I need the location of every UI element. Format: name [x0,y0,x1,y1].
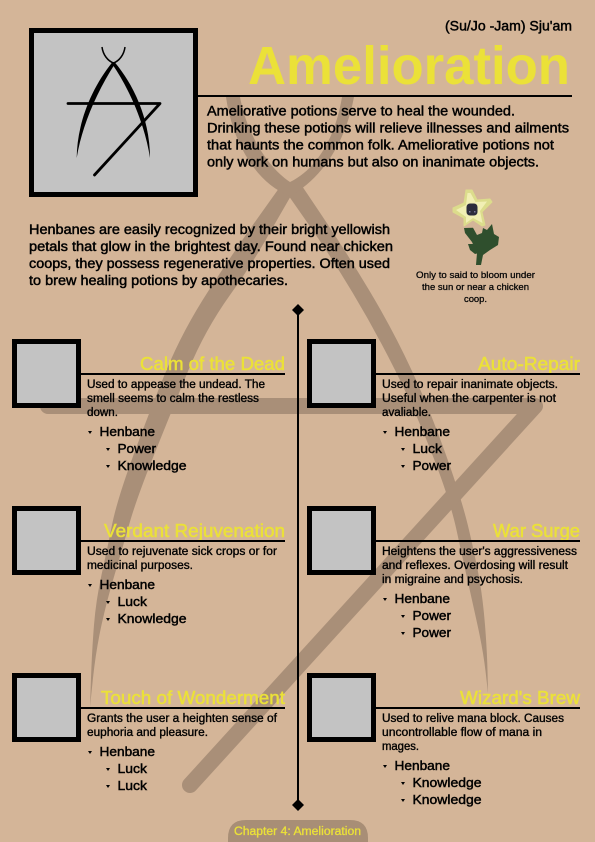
description: smell seems to calm the restless [87,393,259,405]
ingredient list [88,744,155,793]
ingredient list: Henbane [100,744,155,759]
henbane description: to brew healing potions by apothecaries. [29,273,288,288]
flower caption: the sun or near a chicken [422,282,529,293]
description: and reflexes. Overdosing will result [382,560,569,572]
flower caption: Only to said to bloom under [416,270,535,281]
symbol panel [32,30,196,194]
ingredient list: Henbane [100,577,155,592]
description: down. [87,407,118,419]
description: Used to appease the undead. The [87,379,265,391]
icon: henbane flower [453,190,499,265]
description: Grants the user a heighten sense of [87,713,278,725]
ingredient list: Luck [412,441,443,456]
ingredient list: Power [412,608,452,623]
card: Touch of Wonderment [14,676,285,793]
intro paragraph: Drinking these potions will relieve illnesses and ailments [207,120,569,136]
henbane description: petals that glow in the brightest day. Found near chicken [29,239,393,254]
ingredient list [88,424,186,473]
card: Auto-Repair [310,342,580,473]
description: medicinal purposes. [87,560,193,572]
ingredient list: Luck [118,761,148,776]
intro paragraph [207,104,569,170]
description: Used to repair inanimate objects. [382,379,558,391]
ingredient list: Knowledge [118,458,186,473]
description: Heightens the user's aggressiveness [382,546,577,558]
card: Calm of the Dead [14,342,285,473]
description: Used to relive mana block. Causes [382,713,564,725]
heading: Touch of Wonderment: Touch of Wonderment [101,688,285,708]
ingredient list [383,758,482,807]
description [87,546,277,572]
ingredient list: Henbane [100,424,155,439]
henbane description: coops, they possess regenerative properties. Often used [29,256,390,271]
card: War Surge [310,508,580,640]
description: euphoria and pleasure. [87,727,208,739]
ingredient list: Luck [118,778,148,793]
footer chapter tab [228,820,368,842]
description [382,546,577,586]
ingredient list: Knowledge [412,775,482,790]
ingredient list: Power [412,458,452,473]
description: in migraine and psychosis. [382,574,523,586]
intro paragraph: that haunts the common folk. Ameliorative potions not [207,138,554,152]
description: avaliable. [382,407,431,419]
ingredient list: Power [118,441,157,456]
description [382,379,558,419]
description [382,713,564,753]
background watermark glyph [48,97,535,785]
ingredient list: Knowledge [118,611,186,626]
ingredient list [88,577,186,626]
ingredient list: Henbane [394,591,450,606]
ingredient list: Power [412,625,452,640]
ingredient list [383,424,452,473]
description: Used to rejuvenate sick crops or for [87,546,277,558]
description: mages. [382,741,419,753]
heading: Calm of the Dead: Calm of the Dead [140,354,285,374]
title: Amelioration [248,36,570,96]
henbane description: Henbanes are easily recognized by their bright yellowish [29,222,390,237]
description: uncontrollable flow of mana in [382,727,542,739]
central divider with diamonds [292,304,304,811]
henbane description [29,222,393,288]
icon: ameliorative glyph [68,47,160,175]
description [87,713,278,739]
author tag: (Su/Jo -Jam) Sju'am [445,18,572,34]
footer label: Chapter 4: Amelioration [234,826,361,838]
ingredient list: Henbane [394,424,450,439]
ingredient list: Henbane [394,758,450,773]
heading: War Surge: War Surge [493,521,580,541]
heading: Verdant Rejuvenation: Verdant Rejuvenation [104,521,285,541]
intro paragraph: Ameliorative potions serve to heal the wounded. [207,104,515,118]
flower caption [416,270,535,305]
card: Verdant Rejuvenation [14,508,285,626]
description [87,379,265,419]
ingredient list: Luck [118,594,148,609]
intro paragraph: only work on humans but also on inanimate objects. [207,154,539,170]
description: Useful when the carpenter is not [382,393,557,405]
heading: Auto-Repair: Auto-Repair [478,354,580,374]
card: Wizard's Brew [310,676,581,807]
flower caption: coop. [464,294,487,305]
ingredient list: Knowledge [412,792,482,807]
heading: Wizard's Brew: Wizard's Brew [460,688,581,708]
ingredient list [383,591,452,640]
